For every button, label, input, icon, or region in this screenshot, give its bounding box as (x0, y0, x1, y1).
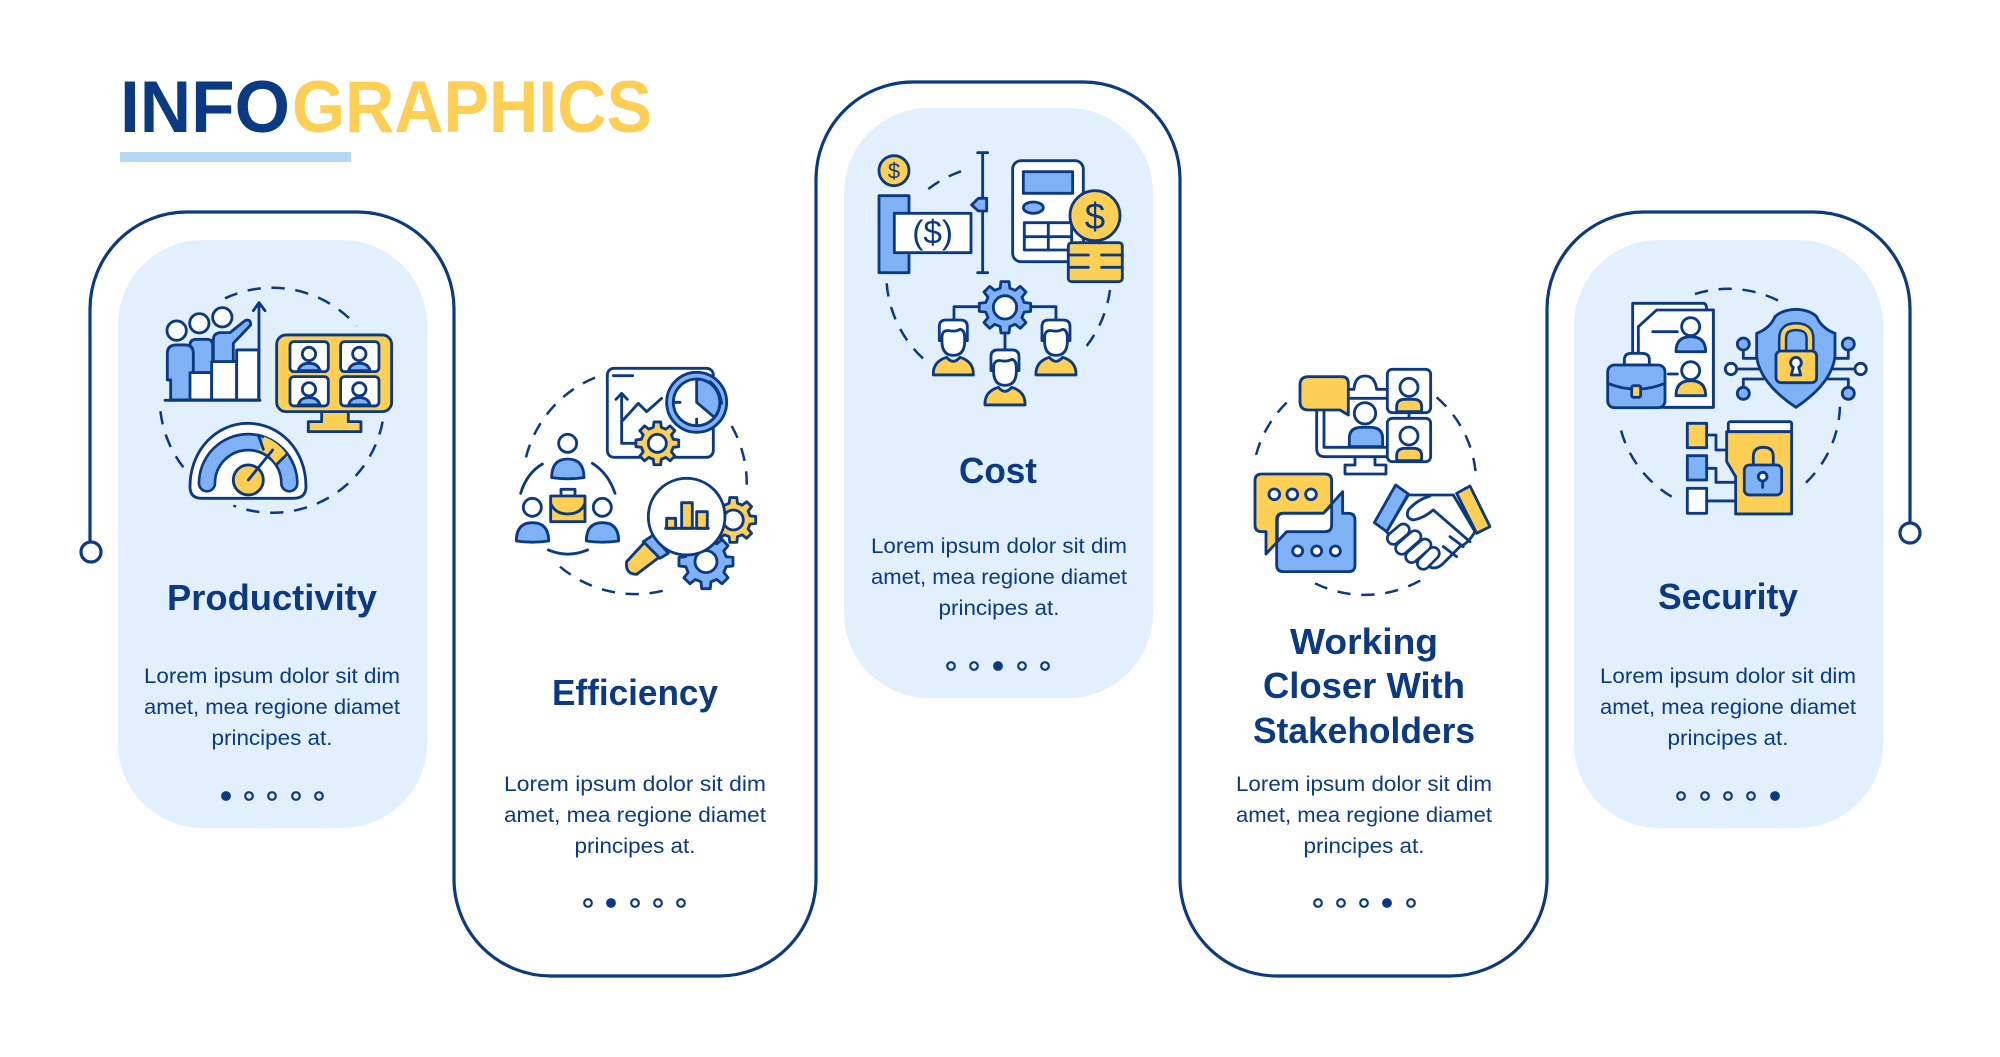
heading: working closer with stakeholders: Working (1290, 621, 1438, 662)
pagination dots: security (1677, 792, 1779, 800)
text block: stakeholders: Lorem ipsum dolor sit dim (1236, 773, 1492, 796)
heading: working closer with stakeholders: Closer With (1263, 665, 1465, 706)
icon: cost (879, 153, 1122, 405)
text block: security: amet, mea regione diamet (1600, 696, 1856, 719)
icon: stakeholders (1255, 369, 1490, 595)
text block: productivity: principes at. (212, 727, 332, 750)
panel: cost (871, 153, 1127, 670)
heading: cost: Cost (959, 450, 1037, 491)
text block: efficiency: Lorem ipsum dolor sit dim (504, 773, 766, 796)
light panel backgrounds (118, 108, 1883, 828)
icon: productivity (160, 288, 392, 513)
text block: stakeholders: amet, mea regione diamet (1236, 804, 1492, 827)
heading: security: Security (1658, 576, 1798, 617)
text block: efficiency: principes at. (574, 835, 696, 858)
pagination dots: stakeholders (1314, 899, 1415, 907)
text block: stakeholders: principes at. (1304, 835, 1424, 858)
connector outline running through all panels (81, 82, 1920, 976)
text block: cost (871, 535, 1127, 620)
icon: efficiency (516, 368, 756, 594)
title (120, 67, 652, 162)
pagination dots: cost (947, 662, 1049, 670)
icon: cost: $ (888, 159, 900, 184)
text block: productivity (144, 665, 400, 750)
heading: productivity: Productivity (167, 577, 377, 618)
text block: security: principes at. (1668, 727, 1788, 750)
panel: working closer with stakeholders (1236, 369, 1492, 907)
title: GRAPHICS (292, 67, 652, 148)
text block: cost: principes at. (938, 597, 1060, 620)
heading: efficiency: Efficiency (552, 672, 718, 713)
heading: working closer with stakeholders: Stakeholders (1253, 710, 1475, 751)
icon: security (1608, 289, 1866, 514)
text block: cost: amet, mea regione diamet (871, 566, 1127, 589)
text block: stakeholders (1236, 773, 1492, 858)
panel: security (1600, 289, 1866, 800)
heading: working closer with stakeholders (1253, 621, 1475, 751)
text block: efficiency (504, 773, 766, 858)
pagination dots: productivity (222, 792, 323, 800)
text block: security: Lorem ipsum dolor sit dim (1600, 665, 1856, 688)
text block: productivity: amet, mea regione diamet (144, 696, 400, 719)
text block: efficiency: amet, mea regione diamet (504, 804, 766, 827)
icon: cost: $ (1085, 196, 1105, 237)
pagination dots: efficiency (584, 899, 685, 907)
icon: cost: ($) (912, 214, 953, 251)
text block: cost: Lorem ipsum dolor sit dim (871, 535, 1127, 558)
title: INFO (120, 67, 290, 148)
text block: productivity: Lorem ipsum dolor sit dim (144, 665, 400, 688)
panel: productivity (144, 288, 400, 800)
text block: security (1600, 665, 1856, 750)
panel: efficiency (504, 368, 766, 907)
